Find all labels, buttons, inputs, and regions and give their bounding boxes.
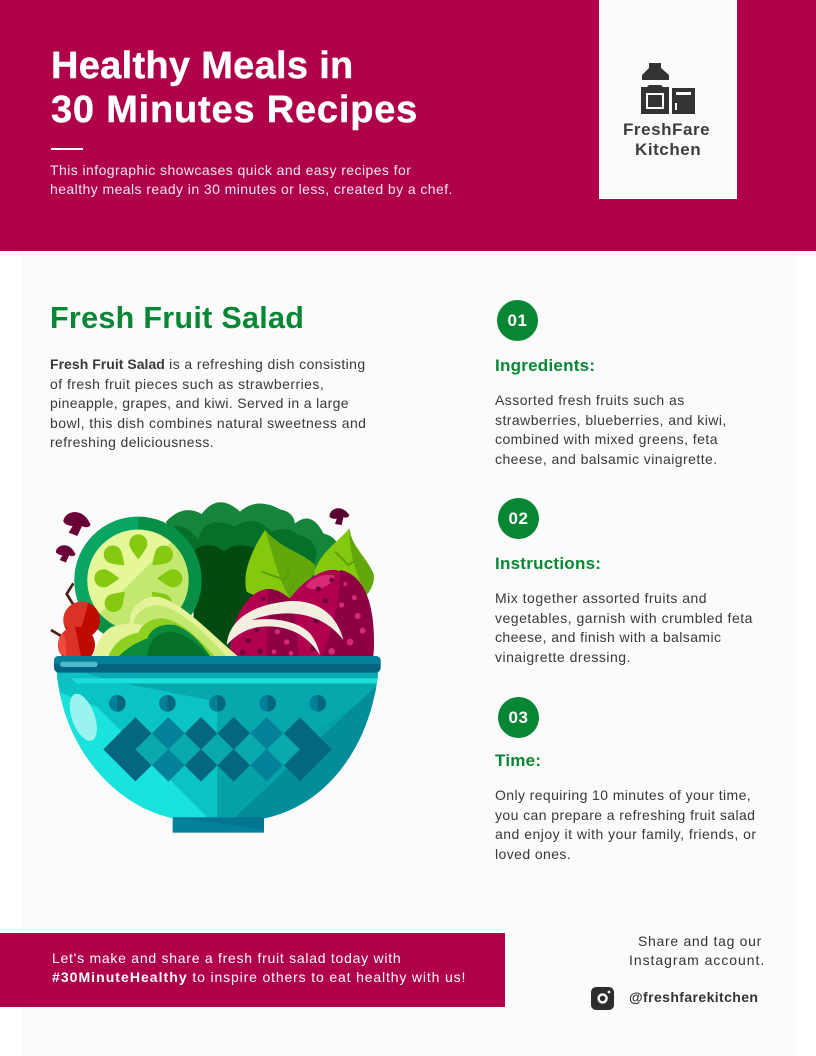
ingredients text: Assorted fresh fruits such as <box>495 392 685 408</box>
lettuce <box>166 502 337 657</box>
recipe description: refreshing deliciousness. <box>50 434 214 450</box>
ingredients text: cheese, and balsamic vinaigrette. <box>495 451 718 467</box>
number badge 03 <box>498 697 539 738</box>
call to action banner <box>0 933 505 1007</box>
share text: Share and tag our <box>638 933 762 949</box>
number badge 02: 02 <box>508 509 529 528</box>
recipe description: of fresh fruit pieces such as strawberries, <box>50 376 324 392</box>
time text: and enjoy it with your family, friends, or <box>495 826 757 842</box>
dots <box>109 695 326 712</box>
title <box>51 45 418 131</box>
time text <box>495 787 757 862</box>
recipe description: pineapple, grapes, and kiwi. Served in a large <box>50 395 349 411</box>
instructions text: cheese, and finish with a balsamic <box>495 629 721 645</box>
cucumber slice <box>73 517 202 644</box>
instructions text: Mix together assorted fruits and <box>495 590 707 606</box>
step 03 <box>495 697 757 862</box>
bowl rim <box>54 656 381 673</box>
mushrooms <box>56 506 351 562</box>
time text: loved ones. <box>495 846 571 862</box>
share text: Instagram account. <box>629 952 765 968</box>
time text: Only requiring 10 minutes of your time, <box>495 787 751 803</box>
icon: instagram <box>591 987 614 1010</box>
step 01 <box>495 300 727 467</box>
icon: kitchen <box>641 63 695 114</box>
diamond pattern <box>103 717 332 782</box>
instructions text <box>495 590 753 665</box>
subtitle: healthy meals ready in 30 minutes or less, created by a chef. <box>50 181 453 197</box>
ingredients text: strawberries, blueberries, and kiwi, <box>495 412 727 428</box>
share text <box>629 933 765 968</box>
ingredients text <box>495 392 727 467</box>
time text: you can prepare a refreshing fruit salad <box>495 807 755 823</box>
divider accent <box>51 148 83 150</box>
subtitle: This infographic showcases quick and easy recipes for <box>50 162 411 178</box>
logo text: Kitchen <box>635 140 701 159</box>
logo text <box>623 120 710 159</box>
logo text: FreshFare <box>623 120 710 139</box>
onion rings <box>227 601 343 655</box>
number badge 03: 03 <box>508 708 529 727</box>
leaves <box>245 528 374 599</box>
ingredients text: combined with mixed greens, feta <box>495 431 718 447</box>
call to action text <box>52 950 466 985</box>
subtitle <box>50 162 453 197</box>
number badge 02 <box>498 498 539 539</box>
bowl <box>40 656 390 833</box>
bowl highlight <box>64 690 102 744</box>
pepper <box>93 597 238 657</box>
title: Healthy Meals in <box>51 45 354 87</box>
instructions text: vegetables, garnish with crumbled feta <box>495 610 753 626</box>
heading: time: Time: <box>495 751 541 770</box>
instagram handle: @freshfarekitchen <box>629 989 758 1005</box>
recipe description: Fresh Fruit Salad is a refreshing dish consisting <box>50 356 366 372</box>
background panel <box>22 251 796 1056</box>
illustration: salad bowl <box>50 502 381 833</box>
recipe heading: Fresh Fruit Salad <box>50 301 304 335</box>
number badge 01: 01 <box>507 311 528 330</box>
number badge 01 <box>497 300 538 341</box>
red berries <box>51 583 100 663</box>
radicchio <box>227 570 374 657</box>
instructions text: vinaigrette dressing. <box>495 649 631 665</box>
logo panel <box>599 0 737 199</box>
call to action text: #30MinuteHealthy to inspire others to eat healthy with us! <box>52 969 466 985</box>
recipe description: bowl, this dish combines natural sweetness and <box>50 415 366 431</box>
step 02 <box>495 498 753 665</box>
bowl foot <box>173 817 264 833</box>
heading: ingredients: Ingredients: <box>495 356 595 375</box>
title: 30 Minutes Recipes <box>51 89 418 131</box>
header band <box>0 0 816 251</box>
call to action text: Let's make and share a fresh fruit salad today with <box>52 950 401 966</box>
heading: instructions: Instructions: <box>495 554 601 573</box>
recipe description <box>50 356 366 450</box>
